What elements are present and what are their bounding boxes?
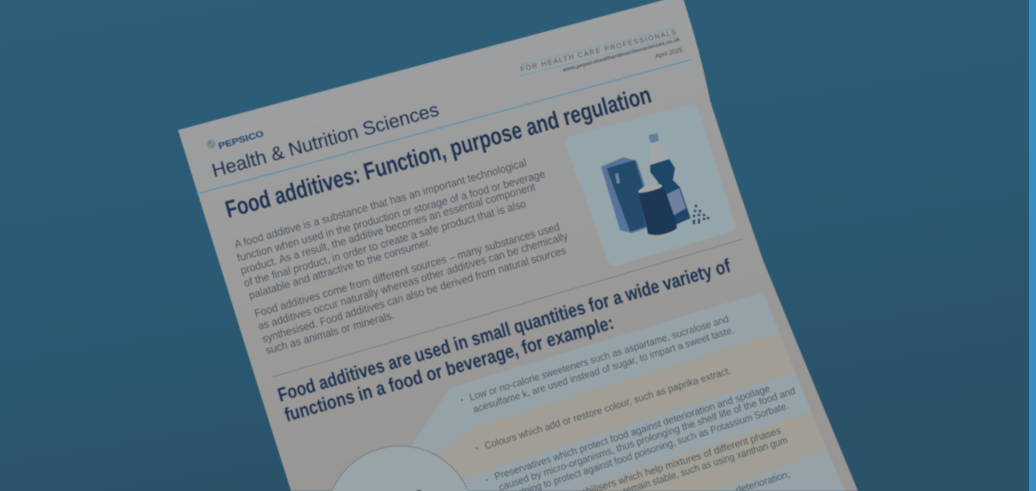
intro paragraph 2: Food additives come from different sources – many substances used [253,221,561,320]
intro paragraph 2: such as animals or minerals. [264,310,396,357]
intro paragraph 1: of the final product, in order to create a safe product that is also [243,198,527,290]
icon: granules [693,205,709,224]
icon: can [638,184,677,238]
dashed circle [326,446,474,491]
paper sheet [178,0,858,491]
brand title: Health & Nutrition Sciences [210,100,441,182]
header rule [197,60,692,194]
date: April 2025 [654,47,684,60]
section heading: Food additives are used in small quantities for a wide variety of [276,256,733,407]
intro paragraph 1: palatable and attractive to the consumer. [247,237,433,302]
intro paragraph 1: product. As a result, the additive becomes an essential component [239,181,537,277]
bullet marks [461,399,488,481]
header: audience tag [520,28,684,76]
colours text: Colours which add or restore colour, such as paprika extract. [483,366,733,452]
sweeteners text: acesulfame k, are used instead of sugar, to impart a sweet taste. [472,325,736,416]
right edge strip [1029,0,1036,491]
band: colours [437,332,795,478]
main title: Food additives: Function, purpose and regulation [222,82,654,224]
preservatives text: Preservatives which protect food against deterioration and spoilage [493,383,772,483]
example bullets [461,314,797,491]
illustration background [571,110,729,260]
icon: PepsiCo globe [206,139,216,149]
website: www.pepsicohealthandnutritionsciences.co.uk [561,37,681,74]
intro paragraph 1: function when used in the production or storage of a food or beverage [236,168,547,265]
section heading: functions in a food or beverage, for example: [282,313,616,427]
band: preservatives [463,372,811,491]
intro paragraph 2: synthesised. Food additives can also be derived from natural sources [261,245,568,346]
for health care professionals: FOR HEALTH CARE PROFESSIONALS [520,29,677,74]
band: sweeteners [410,292,779,453]
document page [178,0,858,491]
section divider [273,239,743,377]
PepsiCo wordmark: PEPSICO [217,128,265,151]
icon: bottle [648,133,691,226]
band: stabilisers [577,411,827,491]
header: brand [206,100,441,182]
band: antioxidants [717,450,845,491]
panel: illustration [571,110,729,260]
preservatives text: caused by micro-organisms, thus prolonging the shelf life of the food and [498,386,797,491]
intro paragraph 1: A food additive is a substance that has an important technological [233,157,528,251]
intro paragraph 2: as additives occur naturally whereas other additives can be chemically [257,230,570,333]
intro paragraph 1 [233,157,547,302]
icon: carton [601,157,646,233]
section heading [276,256,733,427]
panel: examples [326,292,845,491]
sweeteners text: Low or no-calorie sweeteners such as aspartame, sucralose and [468,314,730,404]
